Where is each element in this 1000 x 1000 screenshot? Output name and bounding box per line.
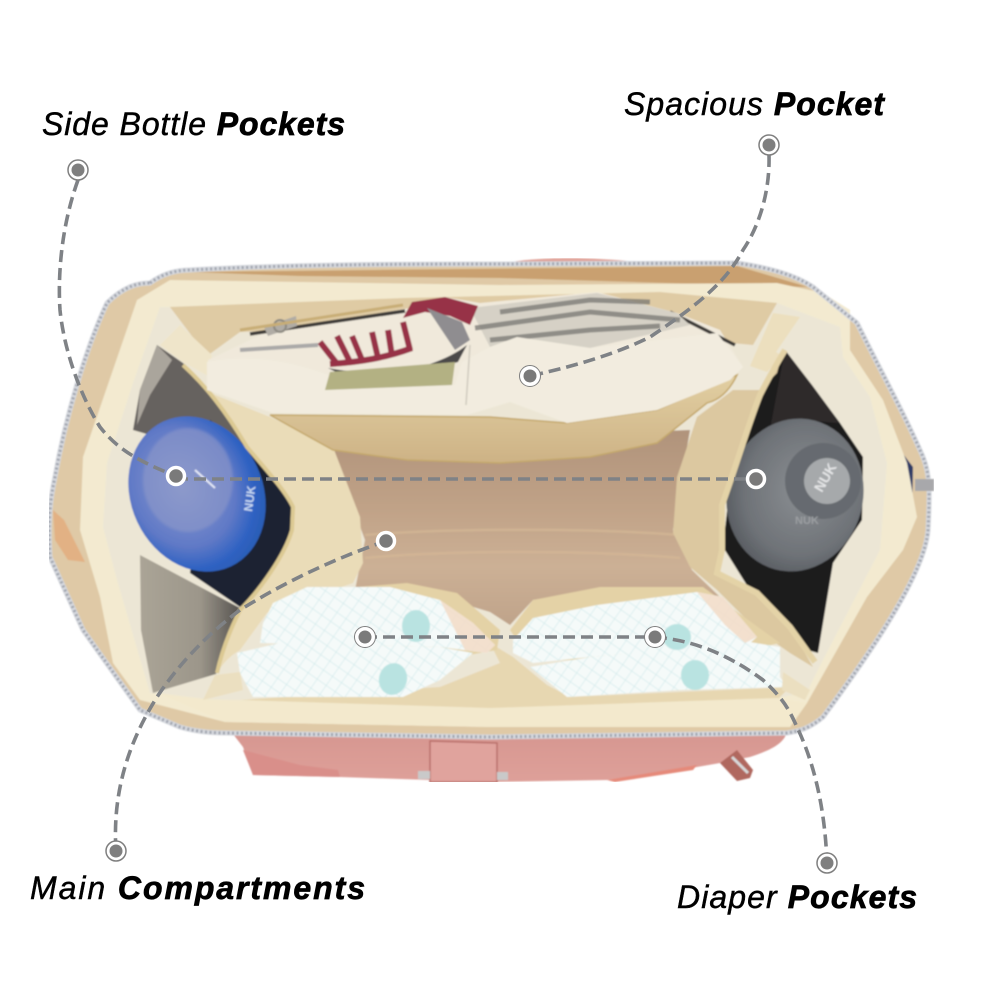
front bottom webbing bbox=[157, 693, 807, 727]
clothes in spacious pocket bbox=[207, 292, 743, 423]
left elastic pocket bbox=[183, 365, 363, 673]
cream webbing ring bbox=[80, 280, 917, 727]
label: main compartments: Main Compartments bbox=[30, 870, 365, 906]
grey bottle: NUK bbox=[795, 515, 819, 527]
interior side cloth bbox=[103, 292, 887, 708]
marker: clothes pocket bbox=[520, 366, 540, 386]
marker: right diaper bbox=[644, 626, 666, 648]
right diaper pocket bbox=[510, 587, 787, 697]
left gathered strap bbox=[160, 325, 212, 376]
main compartment floor bbox=[330, 430, 720, 625]
right gathered strap bbox=[750, 313, 800, 372]
marker: right bottle bbox=[748, 470, 764, 488]
front pocket flap bbox=[270, 375, 737, 463]
label: diaper pockets: Diaper Pockets bbox=[677, 879, 917, 915]
metal zipper pull bbox=[915, 479, 934, 491]
back flap bbox=[170, 292, 777, 356]
zip seam on flap bbox=[240, 305, 403, 330]
bag illustration bbox=[49, 258, 934, 782]
callout lines bbox=[59, 155, 827, 863]
blue bottle bbox=[103, 394, 293, 607]
label: side bottle pockets: Side Bottle Pockets bbox=[42, 106, 345, 142]
grey bottle: NUK bbox=[811, 460, 840, 495]
left diaper pocket bbox=[237, 583, 500, 698]
striped blanket bbox=[470, 293, 690, 348]
floor stitching bbox=[365, 530, 680, 558]
grey bottle bbox=[709, 403, 881, 587]
marker: left diaper bbox=[354, 626, 376, 648]
zipper bbox=[49, 263, 929, 737]
dark gap above clothes bbox=[250, 311, 735, 345]
marker: left bottle bbox=[168, 468, 184, 484]
marker: main compartment bbox=[378, 532, 394, 550]
marker: diaper pockets label point bbox=[817, 853, 837, 873]
navy side trim bbox=[900, 450, 913, 537]
blue bottle: NUK bbox=[241, 484, 259, 512]
cream floor below diapers bbox=[240, 643, 790, 710]
red print bbox=[403, 297, 478, 325]
orange top trim bbox=[190, 266, 808, 287]
marker: main compartments label point bbox=[106, 841, 126, 861]
marker: side bottle label point bbox=[68, 160, 88, 180]
dark fold bbox=[328, 345, 467, 376]
marker: spacious pocket label point bbox=[759, 135, 779, 155]
orange side tab bbox=[53, 510, 85, 562]
left cavity bbox=[133, 345, 270, 693]
white front fleece bbox=[207, 333, 743, 423]
green patch bbox=[325, 362, 455, 390]
bag shell lining bbox=[49, 263, 929, 737]
zipper pull bbox=[264, 316, 297, 336]
right cavity bbox=[723, 350, 863, 653]
right elastic pocket bbox=[673, 350, 815, 667]
label: spacious pocket: Spacious Pocket bbox=[624, 86, 885, 122]
pink bag body bbox=[233, 258, 787, 782]
